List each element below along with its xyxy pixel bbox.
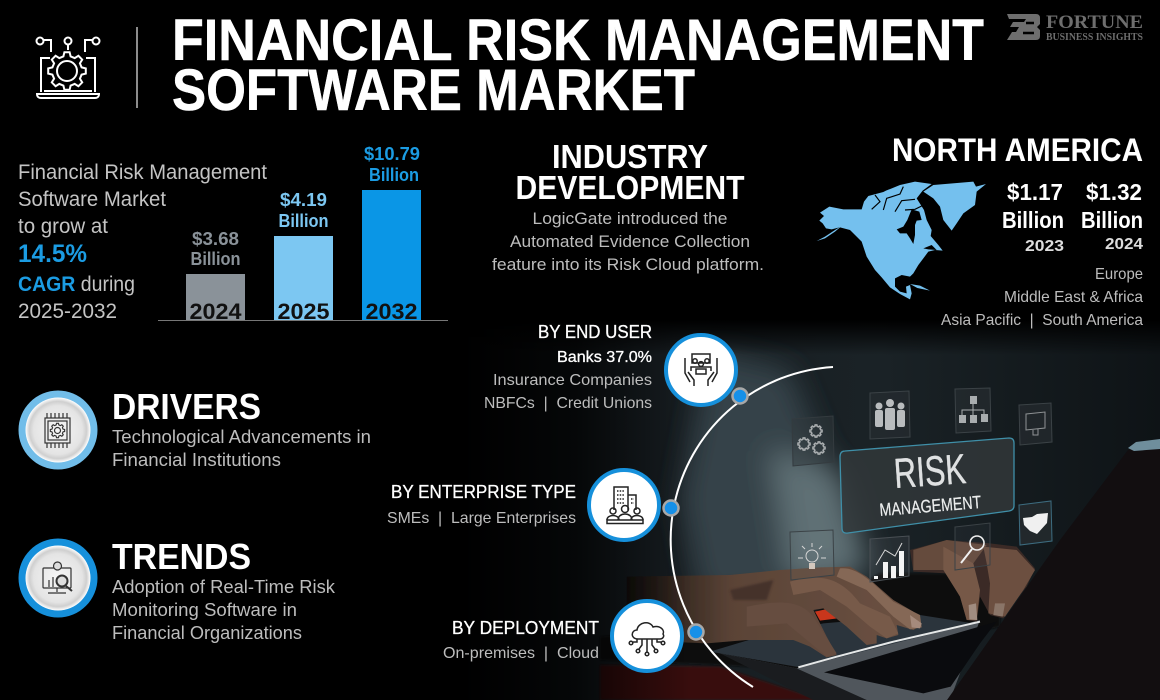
- left fade of the photo: [460, 330, 666, 700]
- hologram tile: monitor: [1019, 403, 1052, 445]
- trends icon: [18, 538, 98, 618]
- segment: by end user: NBFCs | Credit Unions: [484, 395, 652, 412]
- hologram tile: light bulb: [790, 530, 834, 580]
- bar: 2032: 2032: [366, 299, 418, 324]
- laptop rim highlight: [1128, 439, 1160, 451]
- orange stripes: [815, 610, 836, 621]
- regional values: 2024: [1105, 236, 1143, 253]
- trends text: Financial Organizations: [112, 622, 302, 643]
- laptop deck: [720, 620, 980, 700]
- CAGR text block: Software Market: [18, 188, 166, 211]
- other regions: Middle East & Africa: [1004, 289, 1143, 306]
- regional heading: NORTH AMERICA: [892, 132, 1143, 168]
- drivers heading: DRIVERS: [112, 386, 261, 427]
- regional values: $1.32: [1086, 179, 1142, 205]
- CAGR text block: 14.5%: [18, 240, 87, 268]
- trends heading: TRENDS: [112, 536, 251, 577]
- bar: 2032: [362, 144, 421, 324]
- hologram tile: gears: [792, 416, 834, 466]
- icon: cloud network: [612, 601, 682, 671]
- industry development: [492, 138, 764, 274]
- bar: 2025: $4.19: [280, 190, 327, 210]
- CAGR text block: CAGR during: [18, 273, 135, 296]
- bar: 2024: [186, 229, 245, 324]
- other regions: [941, 266, 1143, 329]
- segment: by enterprise type: [387, 482, 576, 527]
- knuckle shading: [730, 580, 773, 600]
- bar: 2025: [274, 190, 333, 324]
- CAGR text block: Financial Risk Management: [18, 161, 267, 184]
- bar: 2032: $10.79: [364, 144, 420, 164]
- title: FINANCIAL RISK MANAGEMENT: [172, 8, 984, 73]
- bar: 2025: Billion: [278, 211, 328, 231]
- hologram tile: magnifier: [955, 523, 990, 570]
- regional values: Billion: [1081, 207, 1143, 233]
- segment: by end user: BY END USER: [538, 322, 652, 342]
- segment: by deployment: BY DEPLOYMENT: [452, 618, 599, 638]
- header divider: [136, 27, 138, 108]
- drivers text: [112, 426, 371, 470]
- industry development: LogicGate introduced the: [532, 209, 728, 228]
- logo: Fortune Business Insights: BUSINESS INSIGHTS: [1046, 32, 1143, 43]
- industry development: INDUSTRY: [552, 138, 708, 175]
- hologram panel: MANAGEMENT: [879, 492, 982, 520]
- regional values: 2023: [1025, 238, 1064, 255]
- map: North America: [817, 182, 986, 299]
- segment: by end user: Insurance Companies: [493, 372, 652, 389]
- regional values: $1.17: [1007, 179, 1063, 205]
- icon: buildings and people: [589, 470, 659, 540]
- industry development: DEVELOPMENT: [516, 169, 744, 206]
- hologram panel: [840, 438, 1014, 533]
- trends text: Monitoring Software in: [112, 599, 297, 620]
- CAGR text block: 2025-2032: [18, 300, 117, 323]
- CAGR text block: [18, 161, 267, 323]
- other regions: Europe: [1095, 266, 1143, 283]
- hologram tile: handshake: [1019, 501, 1052, 545]
- arc connector: [671, 367, 833, 687]
- other regions: Asia Pacific | South America: [941, 312, 1143, 329]
- trends text: [112, 576, 336, 643]
- hologram: risk management panel and icons: [790, 388, 1052, 582]
- logo: Fortune Business Insights: [1007, 13, 1143, 43]
- dark shadow behind hands: [600, 573, 1000, 670]
- lower scene: laptop and hands: [600, 540, 1035, 700]
- drivers text: Financial Institutions: [112, 449, 281, 470]
- laptop screen back: [947, 454, 1125, 700]
- red desk: [600, 665, 820, 700]
- bar: 2024: Billion: [190, 249, 240, 269]
- header icon: laptop with gear: [36, 38, 100, 98]
- hologram panel: RISK: [892, 445, 967, 497]
- keyboard: [824, 622, 997, 693]
- bar: 2025: 2025: [278, 299, 330, 324]
- segment: by end user: Banks 37.0%: [557, 349, 652, 366]
- regional values: Billion: [1002, 207, 1064, 233]
- drivers icon: [18, 390, 98, 470]
- connector dot: end user: [732, 388, 748, 404]
- hologram tile: org chart: [955, 388, 991, 433]
- bar chart: market size: [158, 144, 448, 324]
- segment: by deployment: On-premises | Cloud: [443, 645, 599, 662]
- segment: by end user: [484, 322, 652, 412]
- logo: Fortune Business Insights: FORTUNE: [1046, 13, 1143, 33]
- segment: by deployment: [443, 618, 599, 662]
- icon: hands holding people: [666, 335, 736, 405]
- hologram tile: people: [870, 391, 910, 439]
- connector dot: enterprise type: [664, 500, 678, 516]
- segment: by enterprise type: SMEs | Large Enterprises: [387, 510, 576, 527]
- bar: 2024: $3.68: [192, 229, 239, 249]
- right hand: [910, 540, 1035, 622]
- regional values: [1002, 179, 1143, 255]
- title: SOFTWARE MARKET: [172, 58, 695, 123]
- connector dot: deployment: [688, 624, 704, 640]
- top fade of the photo: [576, 320, 1160, 348]
- keyboard front edge highlight: [798, 622, 980, 667]
- bar: 2024: 2024: [190, 299, 242, 324]
- left hand: [627, 567, 922, 657]
- industry development: Automated Evidence Collection: [510, 232, 750, 251]
- segment: by enterprise type: BY ENTERPRISE TYPE: [391, 482, 576, 502]
- title: [172, 8, 984, 123]
- CAGR text block: to grow at: [18, 215, 108, 238]
- hologram tile: bar chart: [870, 536, 909, 582]
- drivers text: Technological Advancements in: [112, 426, 371, 447]
- background photo: hands typing with risk management hologram: [576, 328, 1160, 700]
- trends text: Adoption of Real-Time Risk: [112, 576, 336, 597]
- industry development: feature into its Risk Cloud platform.: [492, 255, 764, 274]
- bar: 2032: Billion: [369, 165, 419, 185]
